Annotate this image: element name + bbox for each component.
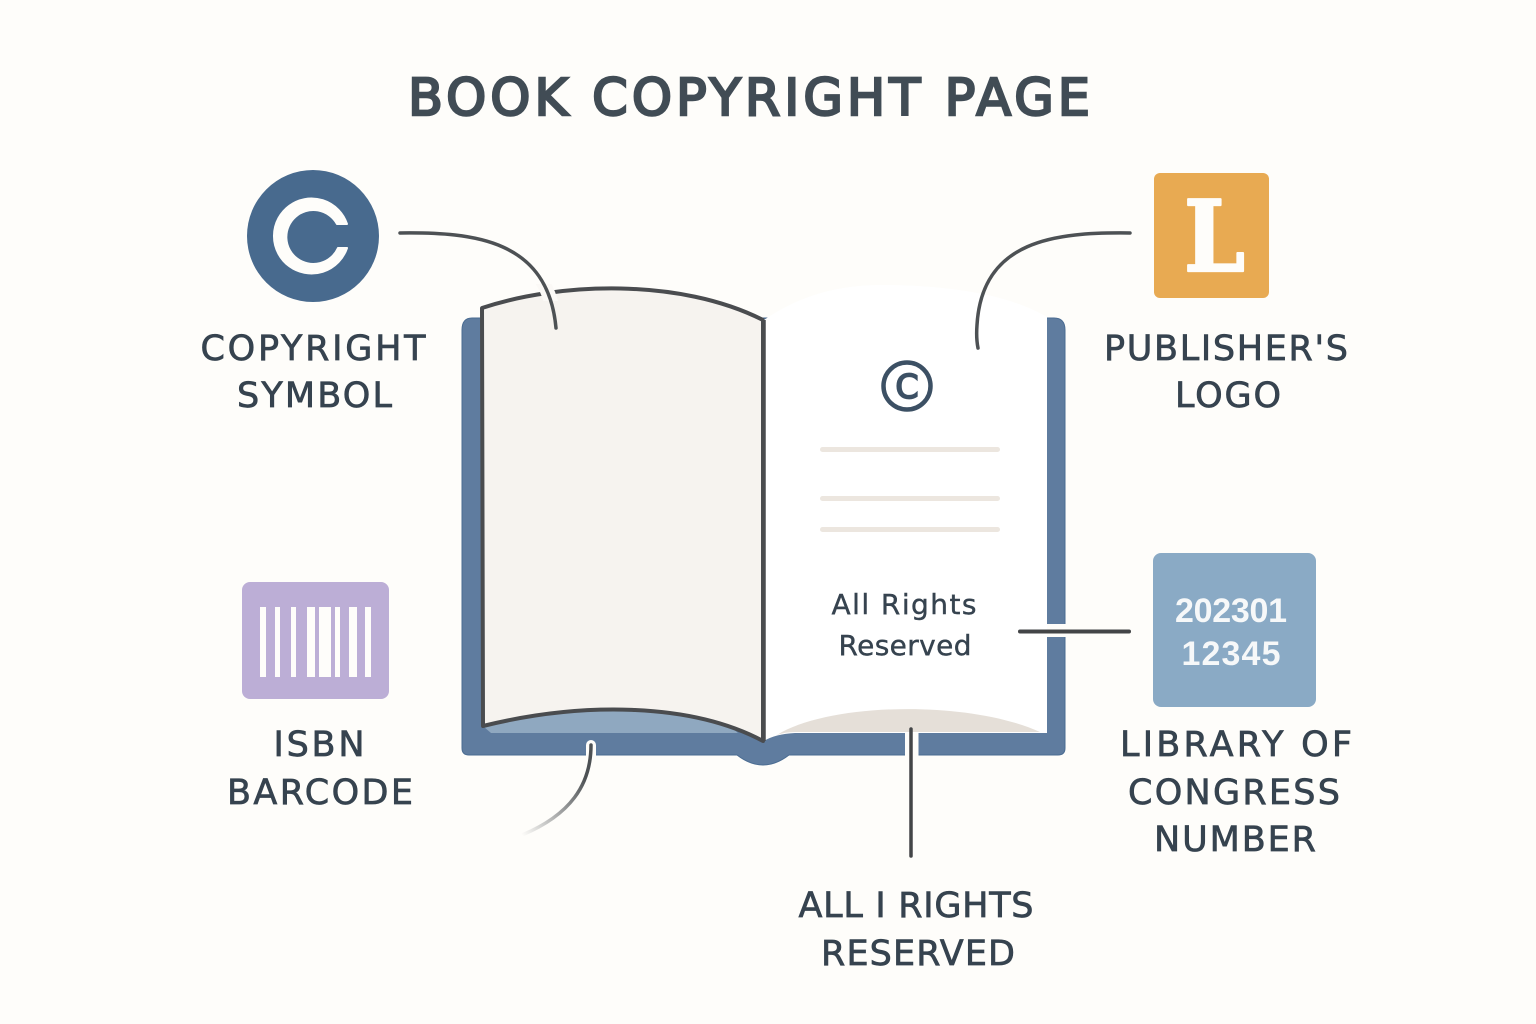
label: all rights reserved: ALL I RIGHTS <box>798 886 1034 926</box>
connector gap on book cover <box>586 745 596 756</box>
spine line <box>762 320 766 741</box>
label: copyright symbol <box>200 329 426 416</box>
icon: publisher's logo <box>1154 173 1269 298</box>
book illustration <box>462 285 1065 765</box>
label: publisher's logo: PUBLISHER'S <box>1104 329 1348 369</box>
left page <box>482 288 763 741</box>
label: publisher's logo: LOGO <box>1175 376 1281 416</box>
label: library of congress number: CONGRESS <box>1128 773 1340 813</box>
page copyright symbol <box>884 362 930 410</box>
connector: copyright symbol to left page <box>400 233 556 328</box>
label: copyright symbol: COPYRIGHT <box>200 329 426 369</box>
label: library of congress number <box>1120 725 1352 860</box>
connector gap on right cover <box>1047 624 1066 637</box>
connector: publisher's logo to page <box>977 233 1130 348</box>
label: library of congress number: LIBRARY OF <box>1120 725 1352 765</box>
title: BOOK COPYRIGHT PAGE <box>408 69 1090 128</box>
right page <box>764 285 1047 741</box>
connector: ISBN barcode to book <box>522 745 591 835</box>
label: all rights reserved <box>798 886 1034 974</box>
connector: all rights reserved <box>909 729 913 856</box>
connector gap on bottom cover <box>905 733 918 756</box>
label: ISBN barcode: ISBN <box>274 725 364 765</box>
label: library of congress number: NUMBER <box>1154 820 1316 860</box>
page text: all rights reserved <box>832 588 976 662</box>
label: ISBN barcode <box>227 725 413 813</box>
book cover <box>462 318 1065 765</box>
right page bottom curl <box>777 709 1040 735</box>
connector gap on left page edge <box>540 290 556 296</box>
label: all rights reserved: RESERVED <box>821 934 1015 974</box>
label: publisher's logo <box>1104 329 1348 416</box>
icon: library of congress number <box>1153 553 1316 707</box>
icon: copyright symbol <box>247 170 379 302</box>
label: ISBN barcode: BARCODE <box>227 773 413 813</box>
left page shadow <box>484 700 738 733</box>
icon: ISBN barcode <box>242 582 389 699</box>
page copyright symbol: C <box>895 367 919 406</box>
page text lines <box>820 447 1000 532</box>
label: copyright symbol: SYMBOL <box>237 376 392 416</box>
icon: publisher's logo: L <box>1184 180 1245 295</box>
connector: library number to page <box>1020 630 1129 634</box>
icon: library of congress number: 12345 <box>1182 635 1280 673</box>
icon: library of congress number: 202301 <box>1175 592 1287 630</box>
page text: all rights reserved: All Rights <box>832 588 976 621</box>
page text: all rights reserved: Reserved <box>838 629 972 662</box>
